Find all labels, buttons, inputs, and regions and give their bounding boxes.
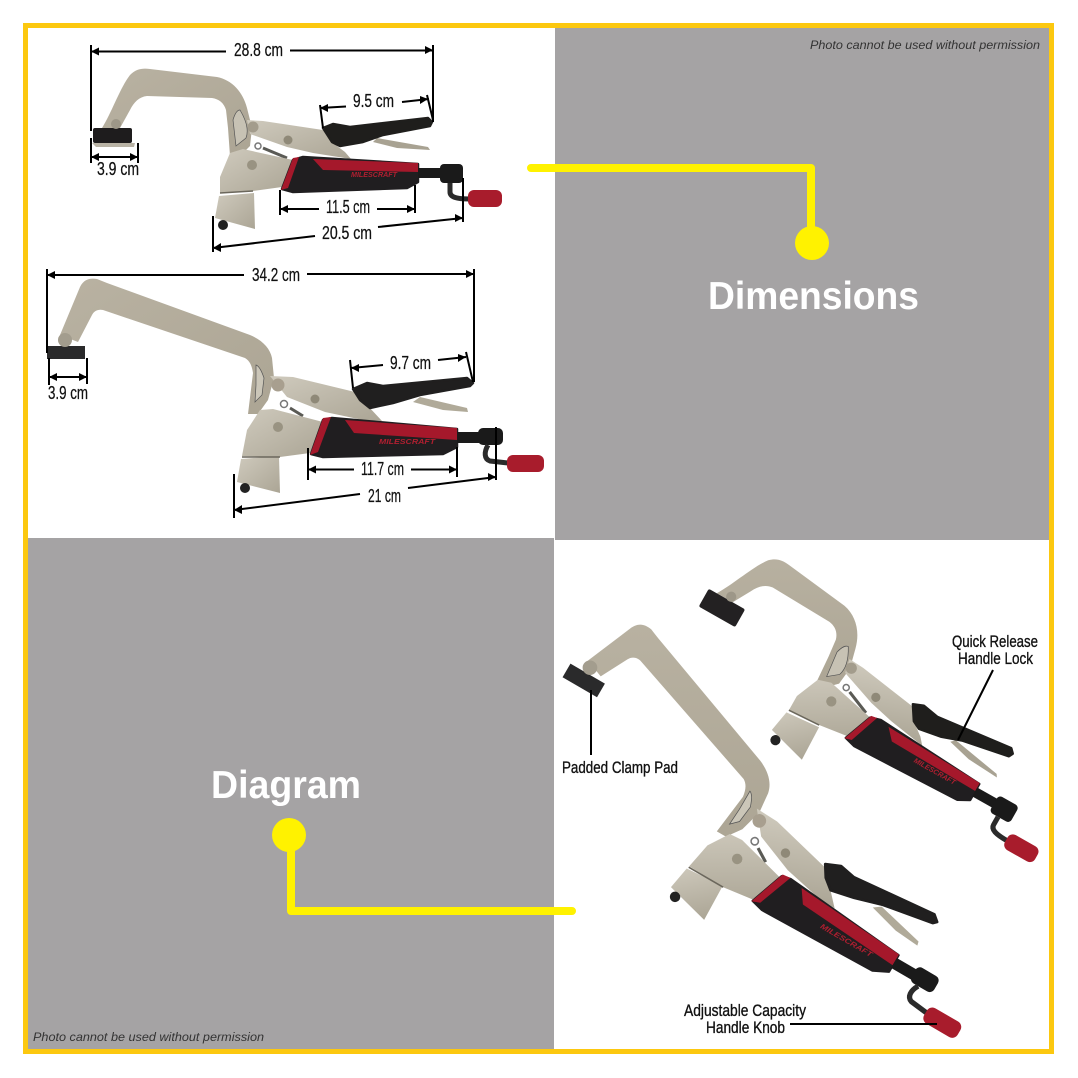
dimension labels: long clamp: 21 cm <box>368 486 401 506</box>
clamp: short angled view: MILESCRAFT <box>912 757 958 787</box>
dimension labels: short clamp: 11.5 cm <box>326 197 370 217</box>
photo notice top: Photo cannot be used without permission <box>810 38 1040 52</box>
connector: diagram <box>272 818 572 911</box>
heading: Dimensions: Dimensions <box>708 275 919 318</box>
dimension labels: short clamp: 28.8 cm <box>234 40 283 60</box>
dimension labels: short clamp: 20.5 cm <box>322 223 372 243</box>
clamp: long front view: MILESCRAFT <box>379 439 436 446</box>
clamp: short angled view <box>658 536 1078 885</box>
panel: dimensions grey <box>555 28 1049 540</box>
dimension labels: long clamp <box>48 265 431 506</box>
clamp: short front view: MILESCRAFT <box>351 172 398 179</box>
clamp: long angled view: MILESCRAFT <box>819 922 875 959</box>
callout: quick release handle lock: Quick Release <box>952 632 1038 651</box>
callout: adjustable capacity handle knob: Handle Knob <box>706 1018 785 1037</box>
dimension labels: long clamp: 11.7 cm <box>361 459 404 479</box>
clamp: short front view <box>92 69 502 230</box>
dimension labels: long clamp: 34.2 cm <box>252 265 300 285</box>
photo notice bottom: Photo cannot be used without permission <box>33 1030 264 1044</box>
dimension lines: short clamp <box>91 45 463 252</box>
dimension labels: long clamp: 9.7 cm <box>390 353 431 373</box>
callout: padded clamp pad <box>562 690 678 777</box>
dimension labels: short clamp: 3.9 cm <box>97 159 139 179</box>
clamp: long front view <box>47 279 544 493</box>
panel: diagram grey <box>28 538 554 1049</box>
heading: Diagram: Diagram <box>211 764 361 807</box>
connector: dimensions <box>531 168 829 260</box>
callout: adjustable capacity handle knob <box>684 1001 937 1037</box>
dimension labels: short clamp <box>97 40 394 243</box>
callout: padded clamp pad: Padded Clamp Pad <box>562 758 678 777</box>
dimension lines: long clamp <box>47 269 496 518</box>
callout: quick release handle lock: Handle Lock <box>958 649 1033 668</box>
callout: adjustable capacity handle knob: Adjustable Capacity <box>684 1001 806 1020</box>
clamp: long angled view <box>493 603 1057 1059</box>
dimension labels: short clamp: 9.5 cm <box>353 91 394 111</box>
callout: quick release handle lock <box>952 632 1038 740</box>
dimension labels: long clamp: 3.9 cm <box>48 383 88 403</box>
